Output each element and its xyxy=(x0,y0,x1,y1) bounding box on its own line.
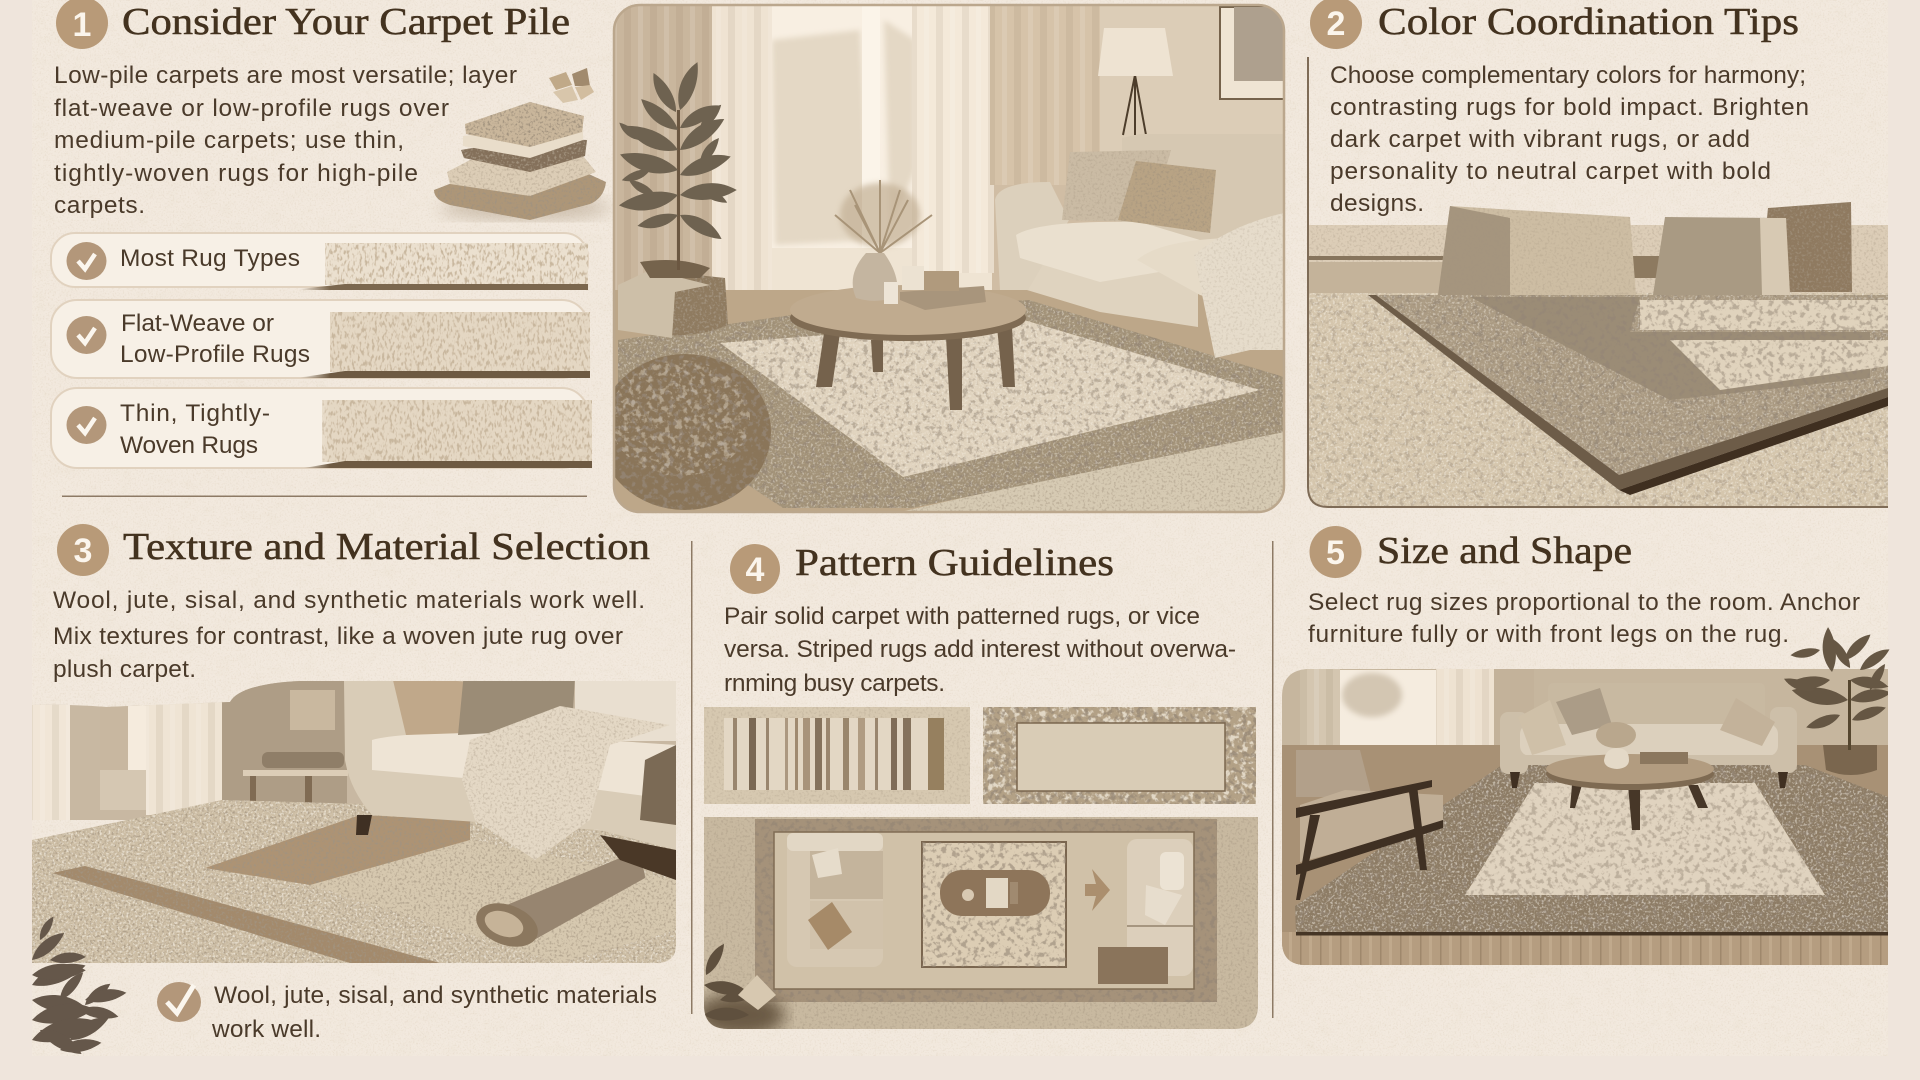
armchair xyxy=(1296,750,1443,900)
vase with dried stems xyxy=(835,180,986,310)
swatch: solid field with patterned border xyxy=(983,707,1256,804)
floor lamp xyxy=(1123,75,1146,135)
list pill: thin tightly-woven rugs xyxy=(51,388,592,468)
section 4: pattern guidelines xyxy=(695,542,1258,1037)
framed picture xyxy=(1220,7,1284,99)
window and curtains xyxy=(1338,670,1438,750)
plant and cushion xyxy=(695,941,785,1037)
throw blanket xyxy=(462,706,670,860)
carpet pile swatch xyxy=(296,312,590,378)
photo: woven jute rug over plush carpet xyxy=(32,672,676,963)
area rug xyxy=(1295,765,1888,933)
sofa xyxy=(1500,683,1797,788)
right curtain xyxy=(990,6,994,185)
carpet floor xyxy=(32,800,676,963)
number badge 4: 4 xyxy=(746,551,765,589)
section 3: texture and material selection xyxy=(28,524,676,1059)
potted plant xyxy=(616,59,737,270)
coffee table xyxy=(940,870,1050,916)
decorative plant xyxy=(28,914,127,1059)
heading 5: Size and Shape xyxy=(1377,530,1632,572)
check icon xyxy=(66,242,106,280)
list pill: most rug types: Most Rug Types xyxy=(120,245,300,272)
pouf xyxy=(599,354,771,510)
body text 1: carpets. xyxy=(54,192,145,219)
body text 2: dark carpet with vibrant rugs, or add xyxy=(1330,126,1750,153)
body text 1: tightly-woven rugs for high-pile xyxy=(54,160,418,187)
body text 4 xyxy=(724,603,1236,697)
floor and carpet xyxy=(614,290,1284,512)
heading 4: Pattern Guidelines xyxy=(795,542,1114,584)
heading 2: Color Coordination Tips xyxy=(1378,1,1799,43)
carpet pile swatch xyxy=(300,243,588,290)
photo: rug and pillows xyxy=(1308,57,1888,507)
wooden side table xyxy=(243,690,348,836)
section 1: consider your carpet pile xyxy=(51,0,610,497)
check icon xyxy=(66,316,106,354)
carpet xyxy=(1308,293,1888,507)
plant rising above photo xyxy=(1782,627,1892,695)
callout text 3 xyxy=(211,982,657,1043)
window xyxy=(772,6,912,248)
body text 5 xyxy=(1308,589,1860,648)
list pill: flat-weave or low-profile rugs: Flat-Weave or xyxy=(121,310,274,337)
back right pillow xyxy=(1760,202,1852,292)
check icon xyxy=(157,982,201,1022)
sofa xyxy=(344,681,676,850)
sheer curtains xyxy=(712,5,772,300)
top-down room layout xyxy=(695,817,1258,1037)
woven rug xyxy=(205,815,470,885)
arrow xyxy=(1085,869,1110,911)
body text 4: Pair solid carpet with patterned rugs, or vice xyxy=(724,603,1200,630)
sofa band xyxy=(1308,225,1888,295)
number badge 4 xyxy=(730,544,780,594)
swatch: striped rug on solid carpet xyxy=(704,707,970,804)
window and curtains xyxy=(100,700,150,770)
number badge 3 xyxy=(57,524,109,576)
list pill: flat-weave or low-profile rugs xyxy=(51,300,590,378)
list pill: thin tightly-woven rugs: Woven Rugs xyxy=(120,432,258,459)
number badge 1: 1 xyxy=(73,6,91,44)
basket with blanket xyxy=(618,260,728,338)
wood floor xyxy=(1282,745,1888,965)
left curtain xyxy=(614,5,726,295)
body text 3: Mix textures for contrast, like a woven jute rug over xyxy=(53,623,623,650)
body text 1: flat-weave or low-profile rugs over xyxy=(54,95,449,122)
icon: small sample squares xyxy=(549,68,594,103)
carpet pile swatch xyxy=(304,400,592,468)
body text 2: contrasting rugs for bold impact. Brighten xyxy=(1330,94,1809,121)
body text 4: versa. Striped rugs add interest without overwa- xyxy=(724,636,1236,663)
list pill: thin tightly-woven rugs: Thin, Tightly- xyxy=(120,400,270,427)
body text 2 xyxy=(1330,62,1809,217)
hero photo: living room with layered rug xyxy=(599,5,1284,512)
number badge 2 xyxy=(1310,0,1362,49)
body text 3: Wool, jute, sisal, and synthetic materials work well. xyxy=(53,587,645,614)
number badge 5 xyxy=(1310,526,1362,578)
number badge 2: 2 xyxy=(1327,5,1345,43)
sofa xyxy=(995,134,1284,327)
body text 5: Select rug sizes proportional to the room. Anchor xyxy=(1308,589,1860,616)
patterned rug xyxy=(1368,295,1888,490)
throw blanket xyxy=(1194,213,1284,358)
section 2: color coordination tips xyxy=(1308,0,1888,507)
section 5: size and shape xyxy=(1282,526,1892,965)
icon: stacked carpet samples xyxy=(434,102,610,220)
check icon xyxy=(66,406,106,444)
coffee table with vase xyxy=(1546,722,1714,830)
body text 5: furniture fully or with front legs on the rug. xyxy=(1308,621,1789,648)
body text 1: medium-pile carpets; use thin, xyxy=(54,127,404,154)
center rug xyxy=(922,842,1066,967)
number badge 1 xyxy=(56,0,108,49)
jute runner xyxy=(52,866,440,963)
side tray xyxy=(1098,947,1168,984)
body text 4: rnming busy carpets. xyxy=(724,670,945,697)
patterned rug xyxy=(310,840,676,963)
body text 2: personality to neutral carpet with bold xyxy=(1330,158,1771,185)
photo: rug sized to the room xyxy=(1282,627,1892,965)
number badge 3: 3 xyxy=(74,532,92,570)
wall xyxy=(1100,6,1283,152)
rolled rug xyxy=(490,858,645,945)
large rug xyxy=(755,819,1217,1002)
callout text 3: Wool, jute, sisal, and synthetic materials xyxy=(214,982,657,1009)
coffee table xyxy=(790,285,1026,410)
body text 1: Low-pile carpets are most versatile; layer xyxy=(54,62,517,89)
body text 1 xyxy=(54,62,517,219)
number badge 5: 5 xyxy=(1326,534,1345,572)
body text 2: designs. xyxy=(1330,190,1424,217)
body text 2: Choose complementary colors for harmony; xyxy=(1330,62,1806,89)
pillows on sofa xyxy=(392,676,470,735)
body text 3: plush carpet. xyxy=(53,656,196,683)
body text 3 xyxy=(53,587,645,683)
front right pillow xyxy=(1653,217,1790,295)
heading 1: Consider Your Carpet Pile xyxy=(122,1,570,43)
right sofa xyxy=(1127,839,1193,976)
plant in pot xyxy=(1790,680,1892,775)
left pillow xyxy=(1438,206,1636,295)
list pill: flat-weave or low-profile rugs: Low-Profile Rugs xyxy=(120,341,310,368)
callout text 3: work well. xyxy=(211,1016,321,1043)
left sofa xyxy=(787,833,883,967)
list pill: most rug types xyxy=(51,233,588,290)
heading 3: Texture and Material Selection xyxy=(123,526,650,568)
area rug xyxy=(618,300,1284,508)
